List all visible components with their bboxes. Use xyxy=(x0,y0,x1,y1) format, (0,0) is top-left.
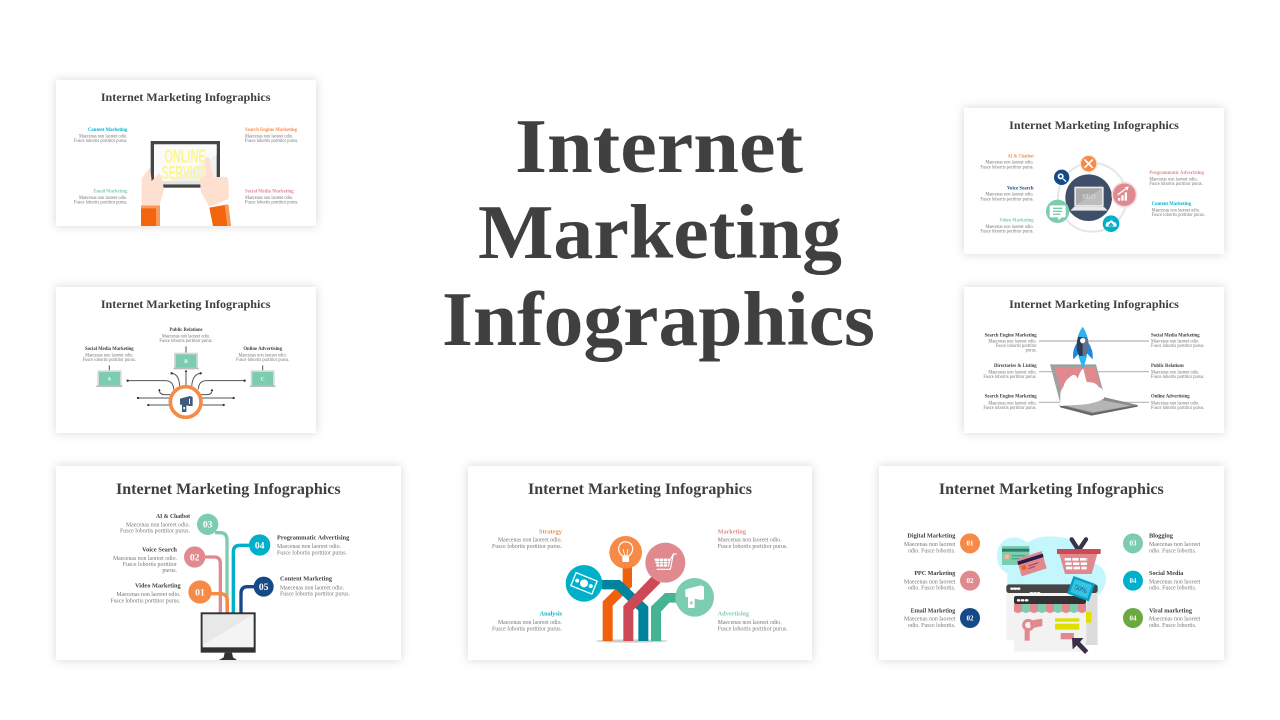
node 02: 02 xyxy=(190,552,200,563)
text: voice search xyxy=(980,186,1034,202)
text: social media marketing: Social Media Marketing xyxy=(1151,333,1200,338)
text: online advertising xyxy=(236,347,289,363)
text: analysis: Maecenas non laoreet odio. xyxy=(498,619,562,626)
text: AI and chatbot xyxy=(980,154,1034,170)
badge 02 pink: 02 xyxy=(967,577,974,585)
text: social media marketing xyxy=(83,347,136,363)
text: PPC marketing xyxy=(904,570,956,592)
text: social media xyxy=(1149,570,1201,592)
text: search engine marketing: Search Engine Marketing xyxy=(245,128,298,133)
panel: megaphone network slide xyxy=(56,287,316,433)
panel: tree infographic slide: Internet Marketing Infographics xyxy=(528,481,752,498)
main title: Internet xyxy=(515,103,803,189)
text: email marketing: Maecenas non laoreet xyxy=(904,616,956,623)
text: blogging xyxy=(1149,533,1201,554)
text: online advertising: Online Advertising xyxy=(243,347,283,352)
text: programmatic advertising: Maecenas non laoreet odio. xyxy=(1149,177,1198,182)
text: public relations: Fusce lobortis porttitor purus. xyxy=(159,339,213,344)
text: marketing xyxy=(718,528,788,550)
node 02 xyxy=(184,546,205,568)
node 01 xyxy=(188,580,212,604)
badge 03 green: 03 xyxy=(1130,540,1137,548)
text: marketing: Maecenas non laoreet odio. xyxy=(718,537,782,544)
text: video marketing: Video Marketing xyxy=(135,582,181,589)
icon: laptop C: C xyxy=(261,377,265,383)
badge 02 pink xyxy=(960,571,980,591)
main title xyxy=(442,103,875,362)
text: programmatic advertising: Fusce lobortis porttitor purus. xyxy=(1149,182,1203,187)
text: search engine marketing bottom: Search Engine Marketing xyxy=(985,395,1037,400)
panel: monitor branches slide xyxy=(56,466,401,660)
text: online advertising: Maecenas non laoreet odio. xyxy=(1151,401,1199,406)
text: search engine marketing top xyxy=(985,333,1037,354)
text: AI and chatbot: AI & Chatbot xyxy=(156,513,191,520)
text: social media marketing: Maecenas non laoreet odio. xyxy=(245,196,293,201)
panel: rocket launch slide xyxy=(964,287,1224,433)
icon: megaphone circle xyxy=(675,578,714,617)
text: content marketing: Content Marketing xyxy=(280,576,333,583)
text: video marketing xyxy=(980,219,1034,235)
text: social media marketing xyxy=(245,190,298,206)
node 05 xyxy=(254,577,274,597)
text: strategy: Fusce lobortis porttitor purus. xyxy=(492,543,562,550)
node 03: 03 xyxy=(203,520,213,531)
text: digital marketing: odio. Fusce lobortis. xyxy=(908,547,956,554)
icon: online shop illustration xyxy=(997,536,1106,654)
text: viral marketing: Maecenas non laoreet xyxy=(1149,616,1201,623)
text: content marketing xyxy=(1152,202,1205,218)
text: programmatic advertising: Fusce lobortis porttitor purus. xyxy=(277,549,347,556)
text: directories and listing: Fusce lobortis porttitor purus. xyxy=(983,375,1037,380)
text: online advertising xyxy=(1151,395,1204,411)
text: strategy: Strategy xyxy=(539,528,563,535)
panel: online service tablet slide xyxy=(56,80,316,226)
main title: Marketing xyxy=(478,189,842,275)
text: AI and chatbot: Maecenas non laoreet odio. xyxy=(126,521,190,528)
text: social media marketing: Maecenas non laoreet odio. xyxy=(85,353,133,358)
text: programmatic advertising xyxy=(277,535,350,556)
text: email marketing: Email Marketing xyxy=(93,190,128,195)
text: digital marketing: Digital Marketing xyxy=(907,533,956,540)
text: search engine marketing bottom: Fusce lobortis porttitor purus. xyxy=(983,406,1037,411)
icon: SEO cycle diagram xyxy=(1046,155,1137,232)
text: directories and listing: Maecenas non laoreet odio. xyxy=(988,370,1037,375)
text: email marketing: Fusce lobortis porttitor purus. xyxy=(74,201,127,206)
text: social media: Social Media xyxy=(1149,570,1184,577)
text: social media marketing: Fusce lobortis porttitor purus. xyxy=(245,201,298,206)
text: content marketing: Fusce lobortis porttitor purus. xyxy=(1152,213,1205,218)
text: video marketing: Maecenas non laoreet odio. xyxy=(116,591,181,598)
text: email marketing: Maecenas non laoreet odio. xyxy=(79,196,127,201)
icon: tablet with hands xyxy=(141,141,231,226)
text: social media marketing: Social Media Marketing xyxy=(85,347,134,352)
text: AI and chatbot: Maecenas non laoreet odio. xyxy=(985,161,1034,166)
panel: rocket launch slide: Internet Marketing Infographics xyxy=(1009,299,1179,311)
text: PPC marketing: PPC Marketing xyxy=(914,570,956,577)
chart: tree ribbons xyxy=(596,567,678,643)
text: public relations xyxy=(159,328,213,344)
text: content marketing: Content Marketing xyxy=(88,128,128,133)
icon: laptop C xyxy=(250,370,275,387)
icon: laptop A: A xyxy=(107,377,111,383)
text: analysis: Analysis xyxy=(540,611,563,618)
text: viral marketing: odio. Fusce lobortis. xyxy=(1149,622,1197,629)
icon: shopping cart circle xyxy=(645,543,685,583)
text: search engine marketing xyxy=(245,128,298,144)
text: directories and listing xyxy=(983,364,1037,380)
panel: online service tablet slide: Internet Marketing Infographics xyxy=(101,92,271,104)
text: email marketing xyxy=(74,190,128,206)
text: viral marketing: Viral marketing xyxy=(1149,607,1193,614)
text: public relations: Maecenas non laoreet odio. xyxy=(1151,370,1199,375)
text: blogging: Maecenas non laoreet xyxy=(1149,541,1201,548)
text: analysis: Fusce lobortis porttitor purus. xyxy=(492,625,562,632)
icon: megaphone in orange ring xyxy=(170,387,201,417)
icon: laptop B: B xyxy=(184,359,188,365)
text: voice search: Maecenas non laoreet odio. xyxy=(113,555,177,562)
panel: SEO cycle slide: Internet Marketing Infographics xyxy=(1009,120,1179,132)
text: strategy: Maecenas non laoreet odio. xyxy=(498,537,562,544)
text: content marketing: Fusce lobortis porttitor purus. xyxy=(280,590,350,597)
text: AI and chatbot: Fusce lobortis porttitor purus. xyxy=(980,165,1034,170)
text: search engine marketing: Maecenas non laoreet odio. xyxy=(245,134,293,139)
badge 04 teal: 04 xyxy=(1130,577,1137,585)
text: programmatic advertising xyxy=(1149,171,1205,187)
text: PPC marketing: Maecenas non laoreet xyxy=(904,578,956,585)
text: email marketing xyxy=(904,607,956,629)
text: social media: Maecenas non laoreet xyxy=(1149,578,1201,585)
text: advertising: Fusce lobortis porttitor purus. xyxy=(718,625,788,632)
panel: online shop slide: Internet Marketing Infographics xyxy=(939,481,1164,498)
text: content marketing: Maecenas non laoreet odio. xyxy=(79,134,127,139)
text: voice search: Voice Search xyxy=(142,546,177,553)
chart: branching lines xyxy=(203,533,255,613)
text: content marketing: Fusce lobortis porttitor purus. xyxy=(74,139,127,144)
text: content marketing: Maecenas non laoreet odio. xyxy=(1152,208,1200,213)
text: video marketing xyxy=(110,582,181,604)
text: social media marketing: Maecenas non laoreet odio. xyxy=(1151,339,1199,344)
icon: rocket leaving laptop xyxy=(1039,327,1149,416)
text: email marketing: Email Marketing xyxy=(911,607,956,614)
text: email marketing: odio. Fusce lobortis. xyxy=(908,622,956,629)
text: programmatic advertising: Programmatic Advertising xyxy=(277,535,350,542)
text: voice search: purus. xyxy=(162,567,177,574)
icon: laptop B xyxy=(173,353,199,369)
text: digital marketing: Maecenas non laoreet xyxy=(904,541,956,548)
text: content marketing xyxy=(74,128,128,144)
text: voice search: Fusce lobortis porttitor xyxy=(123,561,178,568)
badge 02 navy xyxy=(960,608,980,628)
node 01: 01 xyxy=(195,587,205,598)
text: blogging: odio. Fusce lobortis. xyxy=(1149,547,1197,554)
text: advertising xyxy=(718,611,788,632)
text: strategy xyxy=(492,528,563,550)
text: content marketing xyxy=(280,576,350,597)
text: AI and chatbot: AI & Chatbot xyxy=(1008,154,1034,159)
text: programmatic advertising: Maecenas non laoreet odio. xyxy=(277,543,341,550)
text: public relations: Maecenas non laoreet odio. xyxy=(162,334,210,339)
badge 04 green xyxy=(1123,608,1143,628)
text: online advertising: Online Advertising xyxy=(1151,395,1190,400)
text: search engine marketing top: Search Engine Marketing xyxy=(985,333,1037,338)
icon: online shop illustration: 50% xyxy=(1073,582,1089,595)
text: search engine marketing bottom: Maecenas non laoreet odio. xyxy=(988,401,1037,406)
text: search engine marketing top: Fusce lobortis porttitor xyxy=(996,344,1037,349)
text: public relations xyxy=(1151,364,1204,380)
panel: megaphone network slide: Internet Marketing Infographics xyxy=(101,299,271,311)
text: blogging: Blogging xyxy=(1149,533,1174,540)
text: social media marketing: Fusce lobortis porttitor purus. xyxy=(83,358,136,363)
text: online advertising: Fusce lobortis porttitor purus. xyxy=(1151,406,1204,411)
node 05: 05 xyxy=(259,582,269,593)
icon: network connector lines xyxy=(109,346,263,406)
text: PPC marketing: odio. Fusce lobortis. xyxy=(908,585,956,592)
badge 02 navy: 02 xyxy=(967,614,974,622)
panel: online shop slide xyxy=(879,466,1224,660)
node 03 xyxy=(197,514,218,535)
panel: tree infographic slide xyxy=(468,466,812,660)
text: public relations: Public Relations xyxy=(169,328,203,333)
text: public relations: Public Relations xyxy=(1151,364,1184,369)
node 04: 04 xyxy=(255,540,265,551)
text: advertising: Maecenas non laoreet odio. xyxy=(718,619,782,626)
icon: light bulb circle xyxy=(609,536,642,569)
badge 01 orange: 01 xyxy=(967,540,974,548)
text: AI and chatbot: Fusce lobortis porttitor purus. xyxy=(120,528,190,535)
badge 04 green: 04 xyxy=(1130,614,1137,622)
icon: SEO cycle diagram: SEO xyxy=(1082,193,1097,201)
text: social media marketing: Fusce lobortis porttitor purus. xyxy=(1151,344,1204,349)
text: video marketing: Fusce lobortis porttitor purus. xyxy=(110,597,181,604)
text: voice search: Voice Search xyxy=(1007,186,1034,191)
icon: money circle xyxy=(566,565,602,602)
text: marketing: Fusce lobortis porttitor purus. xyxy=(718,543,788,550)
text: public relations: Fusce lobortis porttitor purus. xyxy=(1151,375,1204,380)
main title: Infographics xyxy=(442,276,875,362)
text: video marketing: Fusce lobortis porttitor purus. xyxy=(980,230,1034,235)
text: search engine marketing bottom xyxy=(983,395,1037,411)
text: digital marketing xyxy=(904,533,956,554)
text: voice search: Fusce lobortis porttitor purus. xyxy=(980,197,1034,202)
icon: laptop A xyxy=(96,370,122,387)
text: social media marketing: Social Media Marketing xyxy=(245,190,294,195)
text: advertising: Advertising xyxy=(718,611,750,618)
icon: tablet with hands: ONLINE xyxy=(164,145,206,166)
text: social media marketing xyxy=(1151,333,1204,349)
text: marketing: Marketing xyxy=(718,528,747,535)
icon: tablet with hands: SERVICE xyxy=(162,162,207,183)
text: AI and chatbot xyxy=(120,513,191,535)
text: social media: odio. Fusce lobortis. xyxy=(1149,585,1197,592)
text: online advertising: Maecenas non laoreet odio. xyxy=(238,353,287,358)
panel: SEO cycle slide xyxy=(964,108,1224,254)
text: content marketing: Content Marketing xyxy=(1152,202,1192,207)
text: online advertising: Fusce lobortis porttitor purus. xyxy=(236,358,289,363)
panel: monitor branches slide: Internet Marketing Infographics xyxy=(116,481,341,498)
text: search engine marketing top: purus. xyxy=(1026,349,1037,354)
text: programmatic advertising: Programmatic Advertising xyxy=(1149,171,1205,176)
text: voice search xyxy=(113,546,178,574)
badge 01 orange xyxy=(960,533,980,553)
badge 03 green xyxy=(1123,533,1143,553)
text: content marketing: Maecenas non laoreet odio. xyxy=(280,584,344,591)
badge 04 teal xyxy=(1123,571,1143,591)
icon: desktop monitor xyxy=(201,612,256,660)
text: viral marketing xyxy=(1149,607,1201,629)
text: search engine marketing: Fusce lobortis porttitor purus. xyxy=(245,139,298,144)
text: voice search: Maecenas non laoreet odio. xyxy=(985,193,1034,198)
text: analysis xyxy=(492,611,563,632)
text: directories and listing: Directories & Listing xyxy=(994,364,1037,369)
text: search engine marketing top: Maecenas non laoreet odio. xyxy=(988,339,1037,344)
node 04 xyxy=(249,534,270,556)
text: video marketing: Maecenas non laoreet odio. xyxy=(985,225,1034,230)
text: video marketing: Video Marketing xyxy=(999,219,1034,224)
